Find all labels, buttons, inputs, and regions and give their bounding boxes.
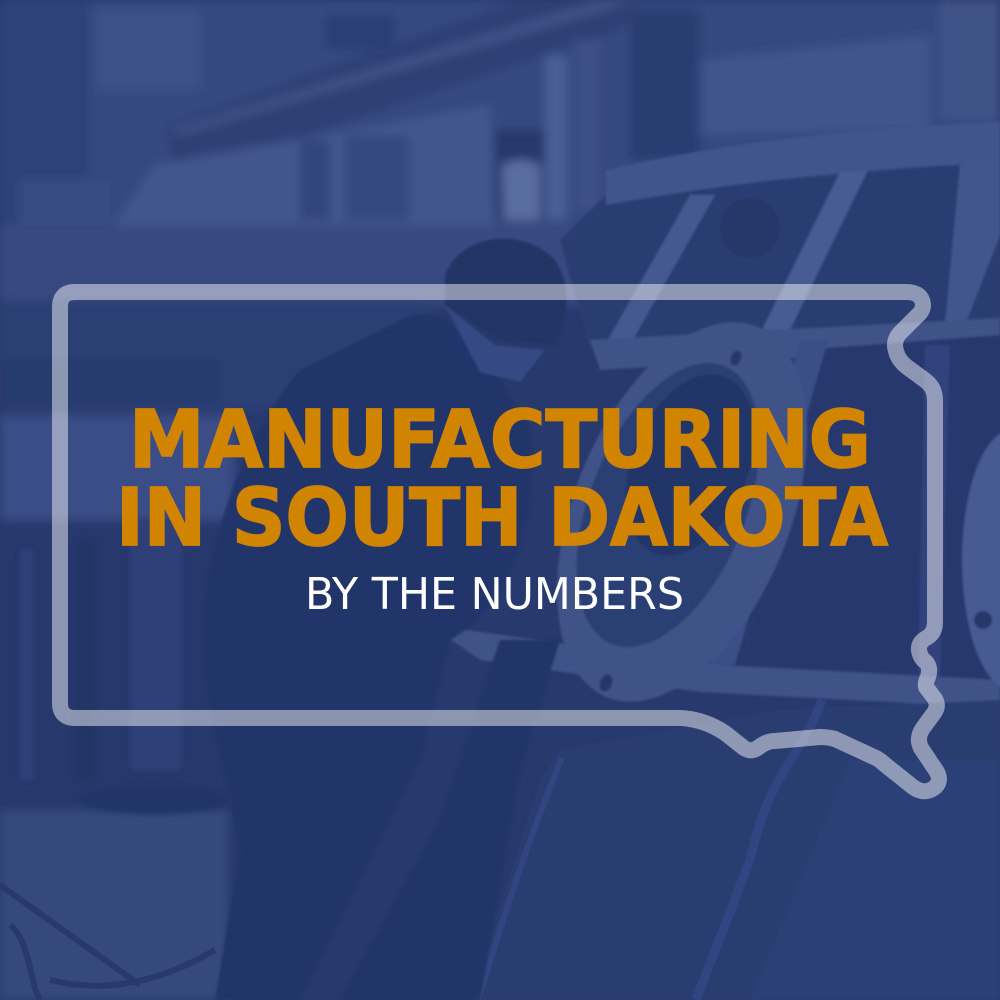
photo: hose on floor <box>0 885 215 1000</box>
title line 1: MANUFACTURING <box>129 394 871 486</box>
subtitle: BY THE NUMBERS <box>305 569 684 620</box>
South Dakota state outline <box>60 292 939 791</box>
photo: machine body <box>430 122 1000 1000</box>
photo: table legs and floor clutter <box>20 520 230 814</box>
title line 2: IN SOUTH DAKOTA <box>116 472 888 564</box>
photo: machine plate edges <box>478 700 822 1000</box>
photo: circular flange <box>507 286 857 738</box>
title <box>116 394 888 564</box>
photo: worker silhouette <box>202 239 567 1000</box>
